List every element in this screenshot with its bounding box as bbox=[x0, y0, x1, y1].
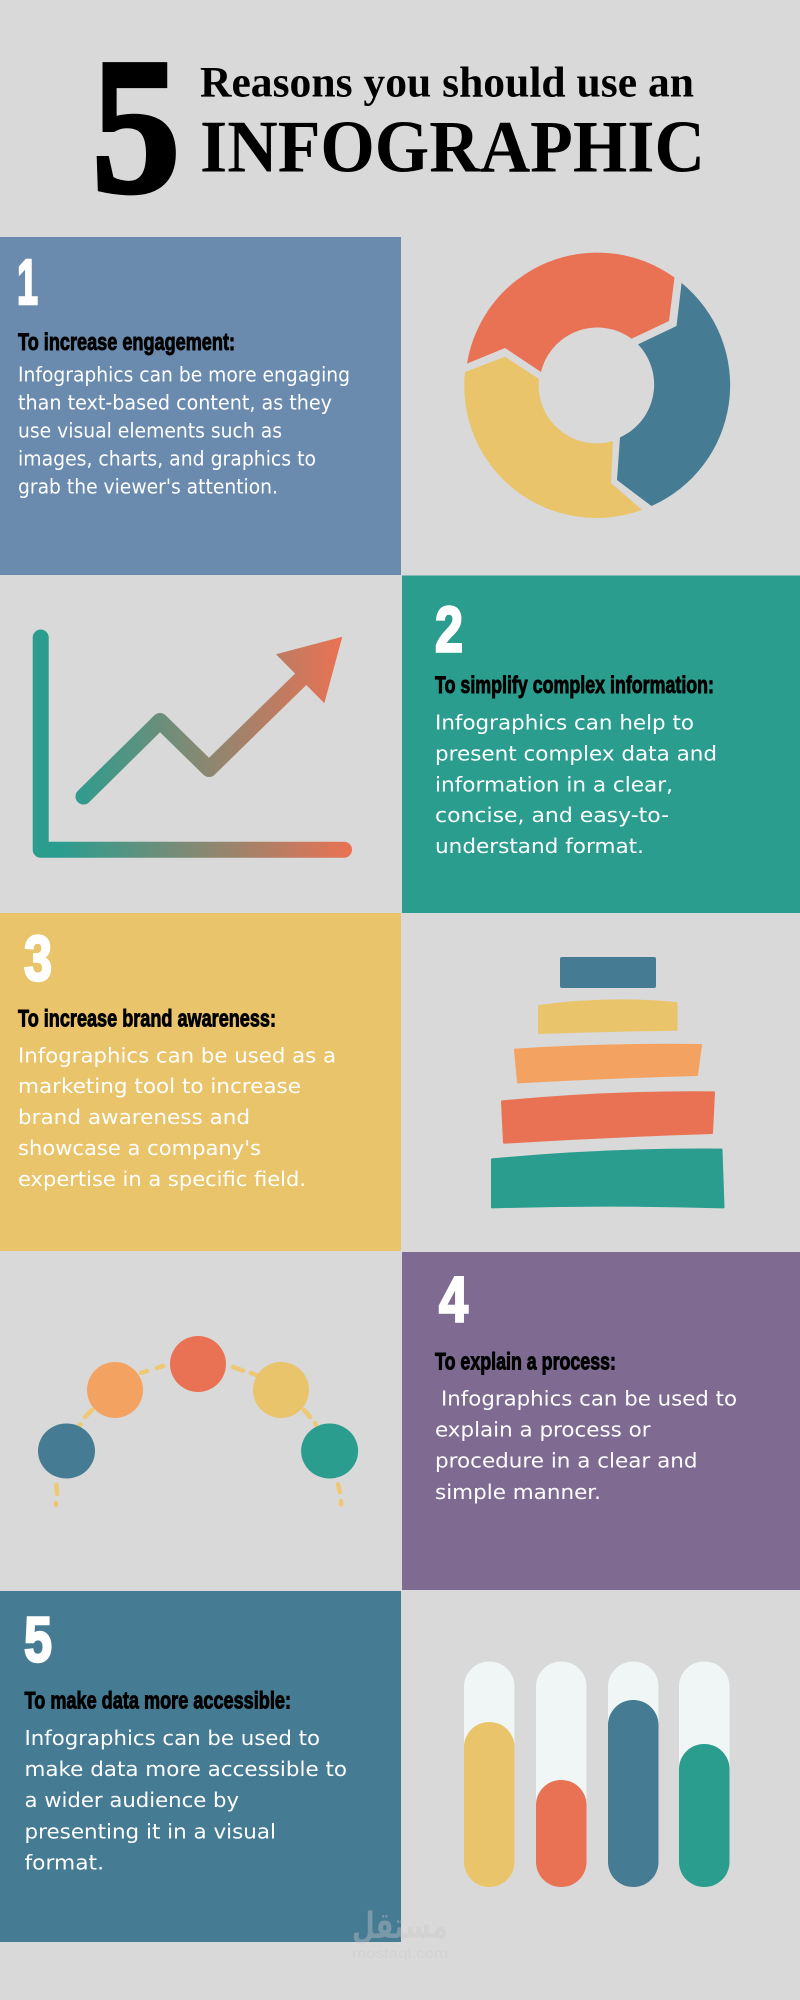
donut segment: blue bbox=[617, 283, 730, 506]
node: yellow bbox=[253, 1362, 309, 1418]
body text 5: a wider audience by bbox=[24, 1788, 239, 1812]
watermark bbox=[352, 1906, 448, 1961]
body text 3: Infographics can be used as a bbox=[18, 1044, 336, 1068]
node: orange bbox=[87, 1362, 143, 1418]
panel 5: accessible data bbox=[0, 1591, 401, 1942]
bar 2 bbox=[536, 1662, 586, 1887]
body text 2: present complex data and bbox=[435, 742, 717, 766]
heading 2: To simplify complex information: bbox=[435, 672, 714, 699]
heading 5: To make data more accessible: bbox=[24, 1688, 291, 1714]
bar 4 bbox=[679, 1662, 730, 1887]
body text 1: than text-based content, as they bbox=[18, 390, 332, 414]
donut segment: coral bbox=[467, 253, 674, 372]
title line 1: Reasons you should use an bbox=[200, 60, 694, 106]
body text 2: Infographics can help to bbox=[435, 710, 694, 734]
heading 3: To increase brand awareness: bbox=[18, 1006, 276, 1032]
body text 5: make data more accessible to bbox=[24, 1757, 347, 1781]
number 1: 1 bbox=[17, 246, 38, 318]
panel 3: brand awareness bbox=[0, 913, 401, 1251]
chart axes bbox=[41, 638, 344, 850]
pyramid tier: teal bbox=[492, 1149, 724, 1207]
stacked pyramid bbox=[492, 957, 724, 1207]
body text 1: grab the viewer's attention. bbox=[18, 474, 278, 498]
panel 4: process bbox=[402, 1252, 800, 1590]
node: teal bbox=[301, 1424, 358, 1478]
pyramid tier: blue bbox=[560, 957, 656, 988]
body text 3: marketing tool to increase bbox=[18, 1074, 301, 1098]
process arc diagram bbox=[38, 1336, 358, 1505]
watermark: مستقل bbox=[352, 1906, 448, 1947]
body text 1: Infographics can be more engaging bbox=[18, 362, 350, 386]
body text 1: use visual elements such as bbox=[18, 418, 282, 442]
body text 2 bbox=[435, 710, 717, 858]
number 2: 2 bbox=[435, 594, 463, 666]
body text 5: presenting it in a visual bbox=[24, 1820, 276, 1844]
trend line bbox=[84, 680, 300, 796]
donut chart bbox=[464, 253, 730, 518]
pyramid tier: yellow bbox=[539, 1000, 676, 1033]
pyramid tier: coral bbox=[502, 1092, 714, 1143]
body text 4: explain a process or bbox=[435, 1418, 651, 1442]
heading 4: To explain a process: bbox=[435, 1348, 616, 1376]
body text 3: brand awareness and bbox=[18, 1105, 250, 1129]
watermark: mostaql.com bbox=[352, 1945, 448, 1961]
body text 5: format. bbox=[24, 1850, 104, 1874]
donut segment: yellow bbox=[464, 357, 642, 518]
body text 3 bbox=[18, 1044, 336, 1191]
body text 4: procedure in a clear and bbox=[435, 1448, 698, 1472]
pill bar chart bbox=[464, 1662, 730, 1887]
body text 3: expertise in a specific field. bbox=[18, 1167, 306, 1191]
arrow head bbox=[276, 637, 342, 703]
body text 4 bbox=[435, 1386, 737, 1504]
pyramid tier: orange bbox=[515, 1045, 701, 1082]
panel 2: complex information bbox=[402, 576, 800, 913]
title bbox=[92, 19, 705, 233]
body text 1: images, charts, and graphics to bbox=[18, 446, 316, 470]
line chart with arrow bbox=[41, 637, 344, 850]
body text 5: Infographics can be used to bbox=[24, 1726, 320, 1750]
number 3: 3 bbox=[24, 922, 52, 994]
body text 5 bbox=[24, 1726, 347, 1874]
number 5: 5 bbox=[24, 1604, 52, 1676]
body text 4: simple manner. bbox=[435, 1480, 601, 1504]
node: coral bbox=[170, 1336, 226, 1392]
panel 1: engagement bbox=[0, 237, 401, 575]
bar 1 bbox=[464, 1662, 514, 1887]
title line 2: INFOGRAPHIC bbox=[200, 106, 705, 188]
heading 1: To increase engagement: bbox=[18, 329, 235, 356]
body text 2: concise, and easy-to- bbox=[435, 803, 669, 827]
body text 3: showcase a company's bbox=[18, 1136, 261, 1160]
bar 3 bbox=[608, 1662, 658, 1887]
node: blue bbox=[38, 1424, 95, 1478]
body text 2: information in a clear, bbox=[435, 772, 673, 796]
dashed connectors bbox=[56, 1366, 341, 1505]
body text 2: understand format. bbox=[435, 834, 644, 858]
body text 1 bbox=[18, 362, 350, 498]
body text 4: Infographics can be used to bbox=[441, 1386, 737, 1410]
number 4: 4 bbox=[439, 1264, 468, 1336]
title numeral 5: 5 bbox=[92, 19, 180, 233]
